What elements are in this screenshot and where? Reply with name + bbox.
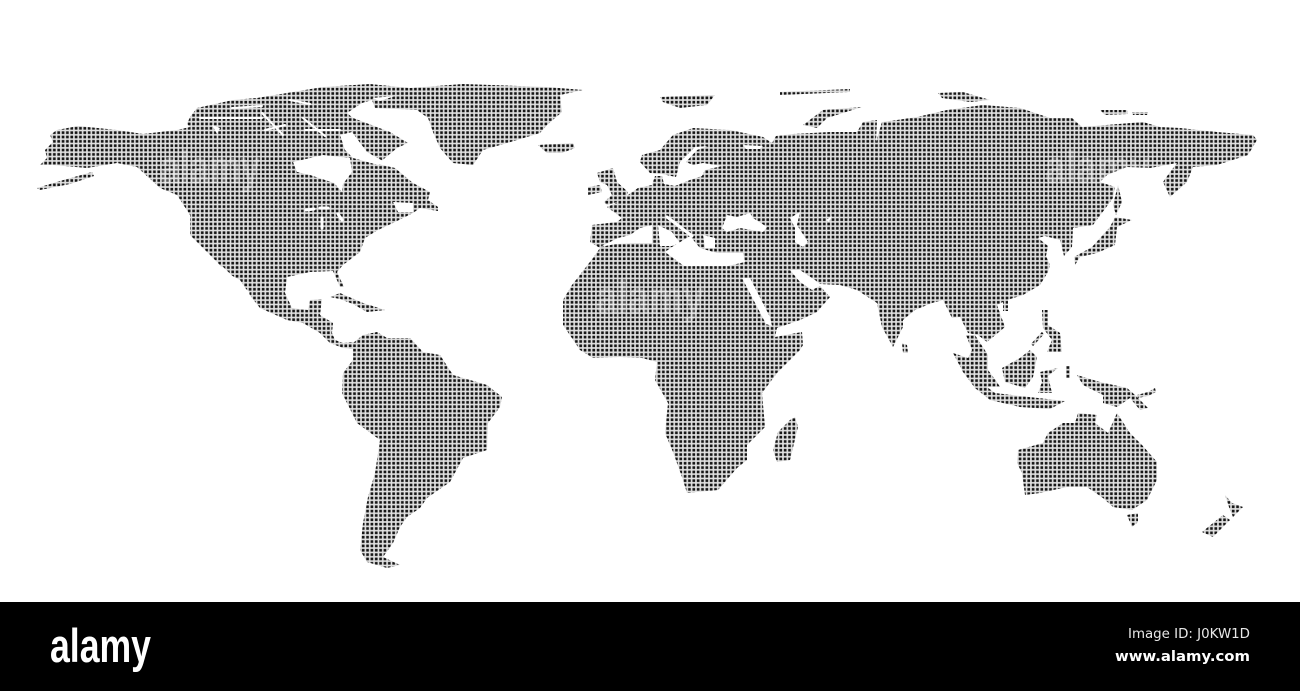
Caribbean islands <box>330 293 385 312</box>
watermark: right: alamy <box>1045 141 1150 193</box>
Australia <box>1017 413 1157 527</box>
Southeast Asia islands <box>953 300 1070 409</box>
Iceland <box>538 143 575 153</box>
website: www.alamy.com <box>1115 649 1250 665</box>
New Zealand <box>1202 495 1243 537</box>
South America <box>342 332 502 568</box>
Japan and Sakhalin <box>1074 185 1132 265</box>
footer bar <box>0 602 1300 691</box>
North America and Greenland <box>37 84 583 349</box>
Eurasia and Africa <box>563 105 1257 493</box>
Arctic islands <box>660 89 1148 128</box>
watermark: centre: alamy <box>596 271 704 323</box>
watermark: left: alamy <box>160 141 260 193</box>
British Isles <box>588 168 628 205</box>
Sri Lanka <box>902 343 908 353</box>
footer logo: alamy <box>50 619 151 672</box>
world map <box>37 84 1257 568</box>
Madagascar <box>773 417 798 462</box>
New Guinea <box>1077 375 1156 410</box>
image ID: Image ID: J0KW1D <box>1128 627 1250 642</box>
